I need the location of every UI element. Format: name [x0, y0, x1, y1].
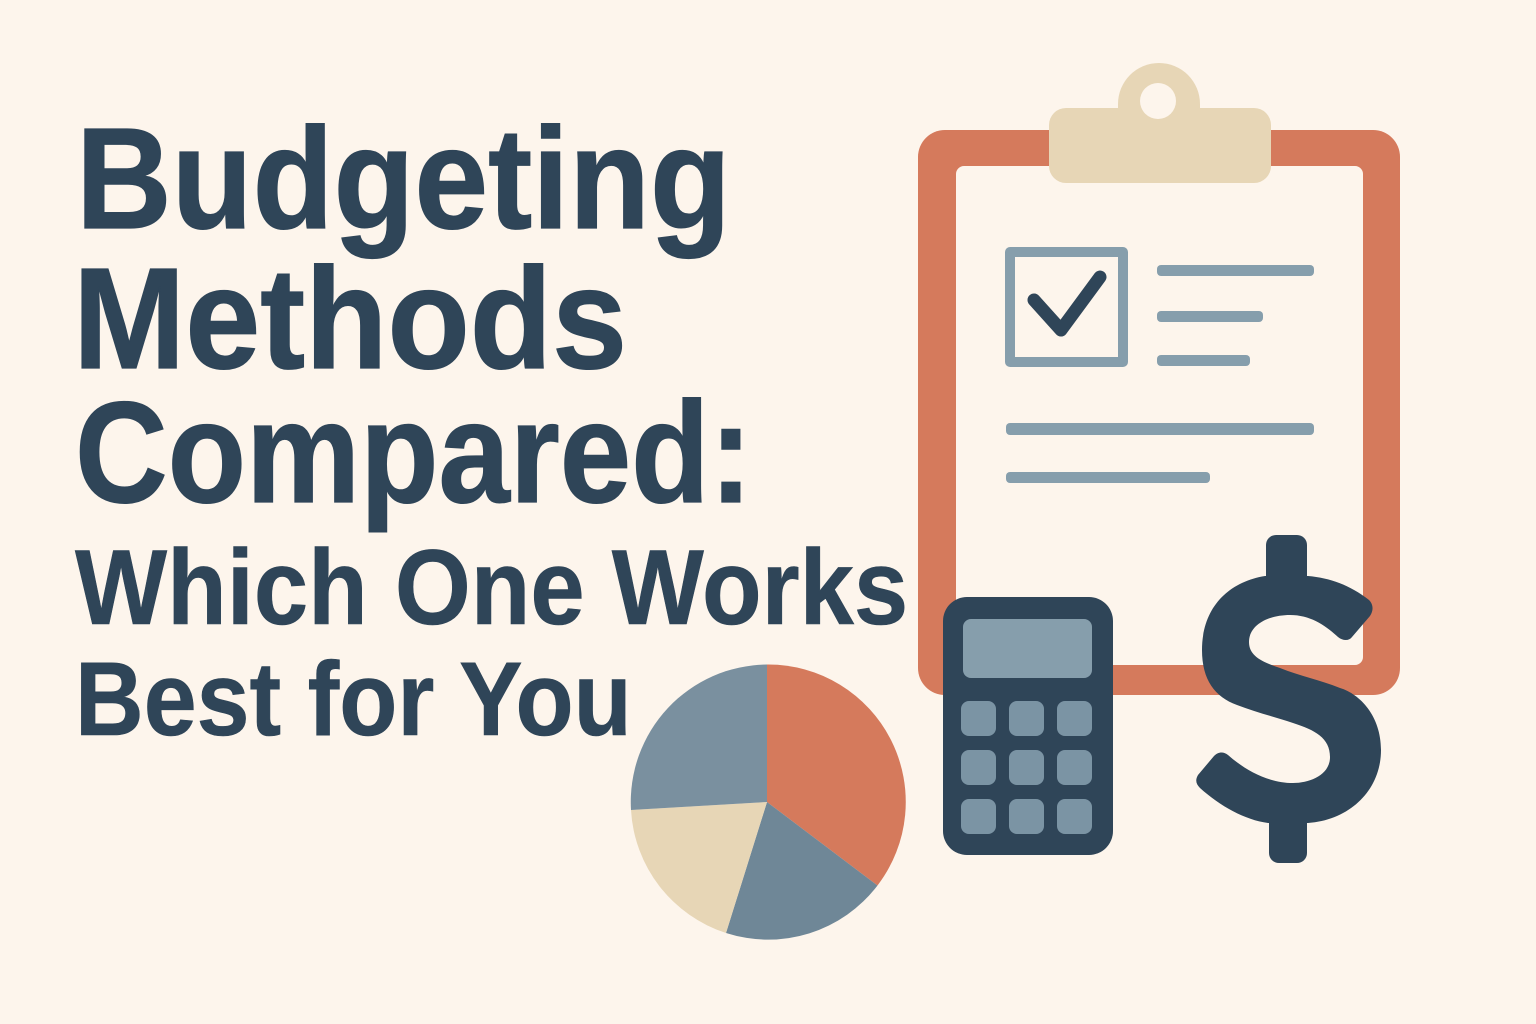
calculator body [943, 597, 1113, 855]
icon: calculator [943, 597, 1113, 855]
calculator screen [963, 619, 1092, 678]
subtitle line 1: Which One Works [75, 527, 908, 647]
pie slice: slate lower [726, 802, 878, 940]
checklist lines [1006, 265, 1314, 483]
title line: Methods: Methods [73, 238, 627, 399]
icon: pie chart [631, 664, 906, 940]
title [73, 98, 908, 758]
pie slice: beige [631, 802, 767, 933]
title line: Compared: Compared: [75, 372, 752, 533]
icon: dollar sign [1196, 535, 1381, 863]
calculator keys [961, 701, 1092, 834]
checkbox with check mark [1010, 252, 1123, 362]
pie slice: slate upper [631, 664, 767, 810]
title line: Budgeting: Budgeting [76, 98, 731, 259]
icon: clipboard [918, 63, 1400, 695]
pie slice: orange [767, 664, 906, 886]
clipboard board [918, 130, 1400, 695]
clipboard clip [1049, 63, 1271, 183]
subtitle line 2: Best for You [75, 641, 632, 758]
